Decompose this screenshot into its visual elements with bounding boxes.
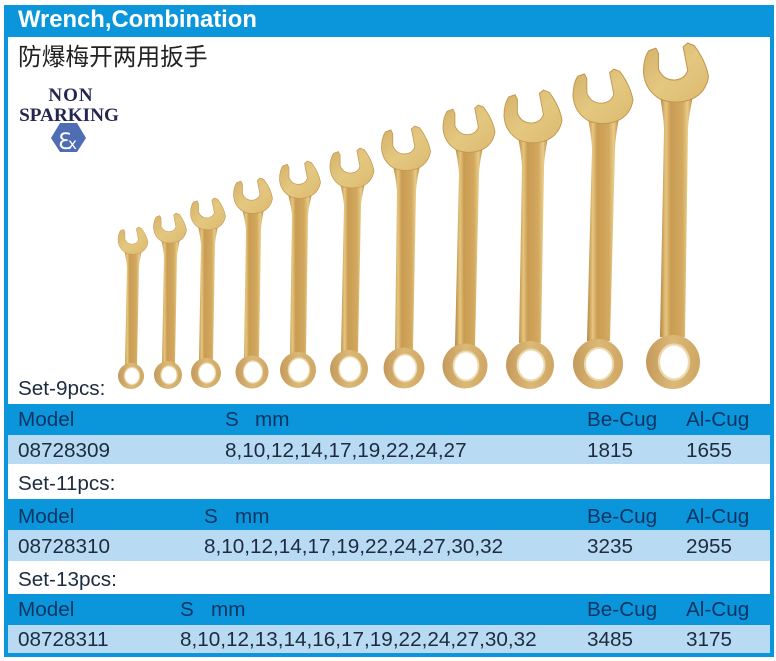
table: set 13: 3175 [686, 628, 732, 651]
label: set 9pcs: Set-9pcs: [18, 377, 105, 400]
wrench 4 [234, 178, 272, 388]
table: set 11: Al-Cug [686, 505, 749, 528]
table: set 13: 8,10,12,13,14,16,17,19,22,24,27,30,32 [180, 628, 537, 651]
table: set 11: S [204, 505, 218, 528]
table: set 9: Al-Cug [686, 408, 749, 431]
wrench 10 [573, 69, 633, 389]
icon: non sparking Ex badge: x [68, 135, 77, 153]
table: set 9: mm [255, 408, 289, 431]
wrench 3 [190, 198, 226, 388]
icon: non sparking Ex badge: Ɛ [58, 130, 72, 155]
table: set 11: 8,10,12,14,17,19,22,24,27,30,32 [204, 535, 503, 558]
table: set 9: Be-Cug [587, 408, 657, 431]
table: set 13: 3485 [587, 628, 633, 651]
table: set 11: Be-Cug [587, 505, 657, 528]
table: set 11: mm [235, 505, 269, 528]
wrench 6 [330, 148, 374, 388]
table: set 11: 3235 [587, 535, 633, 558]
illustration: eleven combination wrenches [118, 42, 709, 389]
table: set 9: 08728309 [18, 439, 110, 462]
table: set 9: Model [18, 408, 74, 431]
table: set 9: 8,10,12,14,17,19,22,24,27 [225, 439, 467, 462]
chinese subtitle: 防爆梅开两用扳手 [18, 45, 208, 71]
label: set 11pcs: Set-11pcs: [18, 472, 115, 495]
table: set 11 [8, 499, 770, 561]
wrench 5 [280, 161, 320, 388]
table: set 13: Model [18, 598, 74, 621]
table: set 9: 1815 [587, 439, 633, 462]
table: set 13: Al-Cug [686, 598, 749, 621]
table: set 13 [8, 594, 770, 653]
label: set 13pcs: Set-13pcs: [18, 568, 117, 591]
wrench 11 [644, 43, 708, 389]
wrench 1 [118, 227, 148, 389]
table: set 11: Model [18, 505, 74, 528]
table: set 13: S [180, 598, 194, 621]
icon: non sparking Ex badge [19, 85, 119, 155]
wrench 2 [154, 213, 186, 389]
table: set 13: Be-Cug [587, 598, 657, 621]
icon: non sparking Ex badge: SPARKING [19, 105, 119, 126]
table: set 9: 1655 [686, 439, 732, 462]
table: set 13: mm [211, 598, 245, 621]
wrench 7 [382, 126, 430, 388]
wrench 8 [442, 105, 495, 388]
table: set 9: S [225, 408, 239, 431]
icon: non sparking Ex badge: NON [48, 85, 94, 106]
table: set 9 [8, 404, 770, 464]
table: set 11: 08728310 [18, 535, 110, 558]
title: Wrench,Combination [18, 6, 257, 33]
table: set 11: 2955 [686, 535, 732, 558]
table: set 13: 08728311 [18, 628, 109, 651]
wrench 9 [504, 90, 562, 389]
